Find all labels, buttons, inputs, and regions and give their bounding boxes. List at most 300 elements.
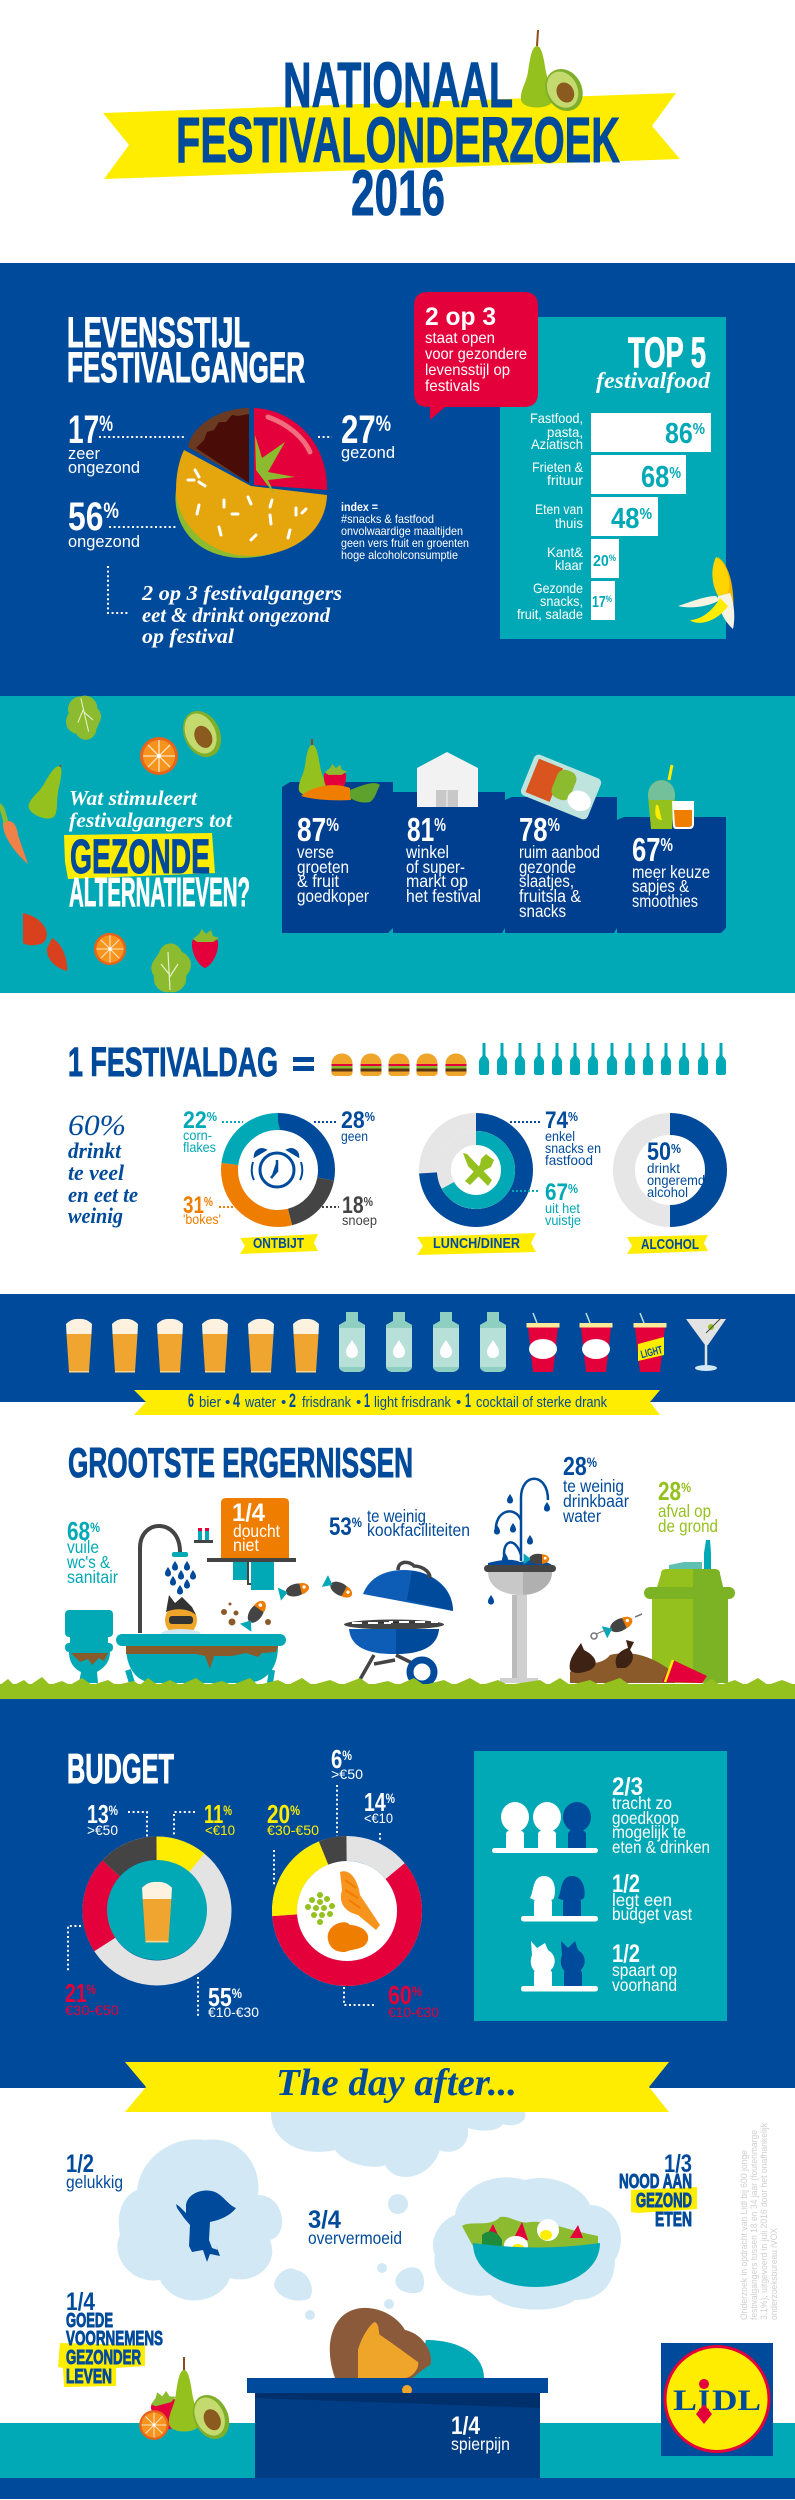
text row 2: 1/2: [612, 1870, 640, 1898]
column: 67%: 67: [632, 831, 669, 868]
labels: drink budget: 55: [208, 1982, 237, 2012]
panel: drinks: [66, 1312, 726, 1415]
bar chart: Gezonde: [533, 580, 583, 596]
bar chart: %: [606, 594, 612, 604]
labels: drink budget: €30-€50: [65, 2002, 119, 2018]
people row 2: [521, 1876, 598, 1922]
labels: drink budget: <€10: [205, 1822, 235, 1838]
label: 1/4 spierpijn: spierpijn: [451, 2434, 510, 2454]
column: 78%: gezonde: [519, 857, 576, 877]
labels: ontbijt: 28: [341, 1107, 368, 1134]
label: 3/4 oververmoeid: oververmoeid: [308, 2228, 402, 2248]
column: 67%: meer keuze: [632, 862, 710, 882]
callout: 2 op 3: festivals: [425, 378, 480, 395]
heading: [596, 329, 711, 393]
icons: soft drinks: [526, 1313, 666, 1372]
heading: 1 FESTIVALDAG: [68, 1039, 278, 1085]
ribbon: drinks legend: water: [244, 1394, 276, 1411]
label: 50%: %: [671, 1141, 681, 1156]
column: 87%: & fruit: [297, 871, 339, 891]
column: 87%: 87: [297, 811, 334, 848]
column: 78%: ruim aanbod: [519, 842, 600, 862]
index definition: hoge alcoholconsumptie: [341, 548, 458, 562]
icon: orange sign 1/4: doucht: [233, 1521, 280, 1541]
callout: 2 op 3: voor gezondere: [425, 346, 527, 363]
bar chart: Fastfood,: [530, 410, 583, 426]
bar chart: frituur: [547, 472, 583, 488]
label: 27%: gezond: [341, 443, 395, 462]
label: 56%: ongezond: [68, 532, 140, 551]
panel: budget: [65, 1744, 727, 2021]
logo: Lidl: DL: [712, 2384, 761, 2417]
icon: litter pile: [570, 1613, 707, 1683]
pie chart: burger: [175, 408, 327, 558]
ribbon: ontbijt: [240, 1234, 318, 1254]
label: 1/3 nood aan gezond eten: GEZOND: [636, 2190, 692, 2212]
statement: 60%: en eet te: [68, 1182, 138, 1207]
labels: food budget: €30-€50: [267, 1822, 319, 1838]
label: 1/2 gelukkig: 1/2: [66, 2150, 94, 2178]
labels: food budget: >€50: [331, 1766, 363, 1782]
title: [103, 30, 680, 229]
bar chart: Aziatisch: [531, 436, 583, 452]
label: 50%: [647, 1138, 705, 1200]
icon: shelf and towels: [194, 1528, 296, 1590]
label: 28% water: 28: [563, 1451, 592, 1481]
label: 56%: 56: [68, 495, 112, 539]
donut: food budget: [284, 1848, 410, 1974]
icon: toilet: [65, 1610, 113, 1683]
ribbon: drinks legend: •: [225, 1394, 230, 1411]
labels: lunch/diner: 67: [545, 1179, 572, 1206]
bar chart: 20: [593, 553, 611, 570]
icon: alarm clock: [252, 1149, 302, 1187]
column: 87%: %: [326, 815, 339, 835]
text row 1: goedkoop: [612, 1808, 679, 1828]
icon: bathtub: [116, 1634, 286, 1683]
ribbon: ontbijt: ONTBIJT: [253, 1235, 304, 1252]
label: 3/4 oververmoeid: [308, 2206, 402, 2248]
panel: grootste ergernissen: [0, 1439, 795, 1699]
bar chart: 17: [592, 594, 610, 611]
icon: waste bin: [644, 1540, 735, 1683]
ribbon: drinks legend: [134, 1390, 660, 1415]
column: 81%: of super-: [406, 857, 465, 877]
labels: ontbijt: 22: [183, 1107, 210, 1134]
icon row: bottles: [479, 1043, 726, 1075]
label: 1/4 goede voornemens: 1/4: [66, 2288, 95, 2316]
callout: 2 op 3: 2 op 3: [425, 303, 496, 331]
label: 68%: [66, 1516, 118, 1587]
icon: pear and avocado: [521, 30, 590, 118]
bar chart: klaar: [555, 557, 583, 573]
panel: 1 festivaldag: [68, 1039, 726, 1255]
ribbon: drinks legend: 1: [465, 1391, 471, 1412]
text row 1: eten & drinken: [612, 1837, 710, 1857]
bar chart: %: [609, 553, 616, 563]
bar chart: pasta,: [547, 424, 583, 440]
index definition: index =: [341, 500, 378, 514]
column: 78%: %: [548, 815, 560, 835]
label: 50%: drinkt: [647, 1160, 680, 1176]
label: 1/4 spierpijn: [451, 2412, 510, 2454]
donut: drink budget: [95, 1849, 219, 1973]
labels: lunch/diner: 74: [545, 1107, 572, 1134]
ribbon: drinks legend: 1: [364, 1391, 370, 1412]
icon: salad bowl: [462, 2217, 600, 2287]
question: festivalgangers tot: [69, 808, 233, 832]
icon: orange sign 1/4: 1/4: [232, 1499, 265, 1527]
label: 1/2 gelukkig: [66, 2150, 123, 2192]
column: 78%: fruitsla &: [519, 886, 581, 906]
ribbon: drinks legend: 2: [289, 1391, 296, 1412]
column: 87%: goedkoper: [297, 886, 369, 906]
labels: ontbijt: %: [364, 1194, 373, 1209]
labels: drink budget: €10-€30: [208, 2004, 259, 2020]
clouds: [117, 2112, 621, 2320]
text row 1: mogelijk te: [612, 1822, 686, 1842]
labels: drink budget: 13: [87, 1799, 116, 1829]
column: 78%: [505, 753, 617, 933]
text row 1: 2/3: [612, 1773, 643, 1801]
label: 17%: %: [99, 411, 113, 436]
labels: drink budget: [65, 1799, 259, 2020]
column: 67%: sapjes &: [632, 876, 689, 896]
heading: FESTIVALGANGER: [67, 344, 305, 392]
column: 81%: 81: [407, 811, 444, 848]
label: 53%: kookfaciliteiten: [367, 1520, 470, 1540]
statement: 60%: te veel: [68, 1160, 125, 1185]
title text: 2016: [351, 157, 445, 229]
column: 81%: %: [434, 815, 446, 835]
column: 78%: 78: [519, 811, 556, 848]
icon: barbecue: [344, 1562, 453, 1684]
ribbon: lunch/diner: [417, 1233, 536, 1255]
donut: alcohol: [624, 1124, 716, 1216]
people row 1: [492, 1802, 598, 1853]
column: 87%: verse: [297, 842, 334, 862]
labels: ontbijt: snoep: [342, 1212, 377, 1228]
ribbon: alcohol: ALCOHOL: [641, 1236, 699, 1253]
ribbon: drinks legend: •: [456, 1394, 461, 1411]
label: 1/4 goede voornemens: GEZONDER: [66, 2347, 141, 2369]
bar chart: [517, 410, 711, 622]
callout: 2 op 3: [414, 292, 538, 420]
label: 68%: 68: [67, 1516, 96, 1546]
icon: shower: [140, 1526, 196, 1633]
label: 1/3 nood aan gezond eten: NOOD AAN: [619, 2171, 692, 2193]
labels: ontbijt: [183, 1107, 377, 1228]
bar chart: thuis: [555, 515, 583, 531]
labels: lunch/diner: snacks en: [545, 1140, 601, 1156]
panel: top 5 festivalfood: [500, 317, 734, 639]
labels: food budget: <€10: [364, 1810, 393, 1826]
script statement: [141, 581, 342, 648]
text row 2: legt een: [612, 1890, 672, 1910]
labels: food budget: 14: [364, 1787, 393, 1817]
logo: Lidl: I: [698, 2384, 710, 2417]
labels: lunch/diner: %: [568, 1181, 578, 1196]
ribbon: drinks legend: •: [281, 1394, 286, 1411]
label: 28% afval: %: [681, 1479, 691, 1495]
text row 1: tracht zo: [612, 1793, 672, 1813]
icon row: burgers: [332, 1054, 466, 1076]
bar chart: Kant&: [547, 544, 584, 560]
labels: lunch/diner: [510, 1107, 601, 1228]
label: 1/3 nood aan gezond eten: 1/3: [664, 2150, 692, 2178]
text row 3: 1/2: [612, 1940, 640, 1968]
bar chart: %: [639, 506, 652, 523]
labels: ontbijt: %: [207, 1109, 217, 1124]
label: 1/3 nood aan gezond eten: [619, 2150, 697, 2231]
bar chart: Eten van: [535, 501, 583, 517]
statement: 60%: weinig: [68, 1203, 123, 1228]
heading: GROOTSTE ERGERNISSEN: [68, 1439, 413, 1486]
label: 1/4 goede voornemens: GOEDE: [66, 2310, 113, 2332]
label: 68%: wc's &: [66, 1552, 110, 1572]
label: 68%: %: [90, 1519, 100, 1535]
column: 87%: groeten: [297, 857, 349, 877]
label: 27%: [341, 408, 395, 462]
labels: lunch/diner: fastfood: [545, 1152, 593, 1168]
label: 56%: %: [103, 498, 119, 523]
question: GEZONDE: [70, 831, 210, 884]
label: 17%: [68, 408, 140, 477]
label: 53%: [329, 1506, 470, 1541]
icon: water fountain: [484, 1479, 556, 1683]
icons: soft drinks: LIGHT: [640, 1344, 664, 1361]
script statement: eet & drinkt ongezond: [142, 603, 330, 627]
column: 78%: snacks: [519, 901, 566, 921]
labels: ontbijt: 31: [183, 1192, 210, 1219]
labels: food budget: 6: [331, 1744, 345, 1774]
small print: [739, 2123, 780, 2320]
title ribbon: [103, 93, 680, 179]
labels: food budget: %: [290, 1802, 300, 1818]
label: 27%: 27: [341, 408, 386, 452]
label: 17%: 17: [68, 408, 112, 452]
question: Wat stimuleert: [69, 786, 198, 810]
callout: 2 op 3: staat open: [425, 330, 495, 347]
bar chart: Frieten &: [532, 459, 584, 475]
ribbon: drinks legend: 6: [188, 1391, 194, 1412]
label: 1/4 goede voornemens: LEVEN: [66, 2366, 112, 2388]
ribbon: drinks legend: 4: [233, 1391, 240, 1412]
icon: orange sign 1/4: [221, 1498, 289, 1558]
labels: food budget: [267, 1744, 439, 2020]
decorative fruit: [0, 693, 228, 992]
column: 81%: het festival: [406, 886, 481, 906]
index definition: geen vers fruit en groenten: [341, 536, 469, 550]
labels: food budget: %: [412, 1983, 422, 1999]
labels: lunch/diner: %: [568, 1109, 578, 1124]
donut: ontbijt: [230, 1122, 326, 1218]
label: 68%: sanitair: [67, 1567, 118, 1587]
labels: drink budget: >€50: [87, 1822, 118, 1838]
icon: fruit group: [139, 2357, 236, 2445]
heading: TOP 5: [628, 329, 706, 377]
label: 50%: 50: [647, 1138, 675, 1166]
small print: 3,1%), uitgevoerd in juli 2016 door het onafhankelijk: [759, 2123, 770, 2320]
donut: lunch/diner: [428, 1122, 524, 1218]
ribbon: drinks legend: light frisdrank: [374, 1394, 451, 1411]
labels: food budget: 60: [388, 1980, 417, 2010]
index definition: #snacks & fastfood: [341, 512, 434, 526]
text row 3: voorhand: [612, 1975, 677, 1995]
column: 81%: markt op: [406, 871, 468, 891]
text row 3: [612, 1940, 677, 1995]
label: 53%: 53: [329, 1513, 357, 1541]
labels: ontbijt: flakes: [183, 1139, 216, 1155]
label: 28% water: te weinig: [563, 1476, 624, 1496]
labels: drink budget: %: [232, 1985, 242, 2001]
label: 28% water: water: [562, 1506, 601, 1526]
label: 28% water: drinkbaar: [563, 1491, 629, 1511]
icons: water bottles: [339, 1312, 506, 1372]
logo: Lidl: [661, 2343, 773, 2456]
icon: man in bath: [161, 1595, 201, 1639]
labels: food budget: €10-€30: [388, 2004, 439, 2020]
bar chart: %: [669, 465, 681, 482]
ribbon heading: The day after...: [276, 2062, 517, 2104]
bar chart: %: [693, 421, 705, 438]
column: 67%: [617, 765, 726, 933]
title text: NATIONAAL: [283, 49, 513, 121]
label: 28% water: [562, 1451, 629, 1526]
label: 1/2 gelukkig: gelukkig: [66, 2172, 123, 2192]
labels: lunch/diner: vuistje: [545, 1212, 581, 1228]
labels: ontbijt: %: [365, 1109, 375, 1124]
labels: drink budget: 21: [65, 1978, 94, 2008]
labels: drink budget: 11: [204, 1799, 232, 1829]
column: 81%: winkel: [405, 842, 449, 862]
bar chart: snacks,: [540, 593, 583, 609]
label: 68%: vuile: [67, 1537, 99, 1557]
label: 28% afval: 28: [658, 1476, 687, 1506]
labels: food budget: %: [342, 1747, 352, 1763]
labels: ontbijt: 'bokes': [183, 1211, 221, 1227]
text row 2: budget vast: [612, 1904, 692, 1924]
heading: festivalfood: [596, 368, 711, 393]
label: 27%: %: [376, 411, 391, 436]
bar chart: fruit, salade: [517, 606, 583, 622]
heading: LEVENSSTIJL: [67, 309, 250, 357]
column: 67%: %: [661, 835, 673, 855]
ribbon: lunch/diner: LUNCH/DINER: [433, 1235, 520, 1252]
labels: drink budget: %: [223, 1802, 232, 1818]
illustration: woman asleep at desk: [247, 2308, 548, 2478]
question: [64, 786, 250, 915]
label: 3/4 oververmoeid: 3/4: [308, 2206, 341, 2234]
text row 1: [612, 1773, 710, 1857]
grass: [0, 1677, 795, 1699]
label: 28% afval: de grond: [658, 1516, 718, 1536]
icons: beers: [66, 1319, 319, 1372]
title text: [176, 49, 620, 229]
bar chart: 68: [641, 459, 675, 494]
label: 28% afval: afval op: [658, 1501, 711, 1521]
label: 1/4 goede voornemens: [58, 2288, 163, 2388]
panel: gezonde alternatieven: ALTERNATIEVEN?: [69, 869, 250, 915]
heading: [67, 309, 305, 392]
column: 67%: smoothies: [632, 891, 698, 911]
people row 3: [521, 1941, 598, 1992]
icon: banana: [678, 557, 734, 629]
label: 28% afval: [658, 1476, 718, 1536]
panel: budget behaviour: [474, 1751, 727, 2021]
label: 53%: te weinig: [367, 1506, 426, 1526]
ribbon: drinks legend: bier: [199, 1394, 221, 1411]
label: 28% water: %: [587, 1454, 597, 1470]
label: 1/4 goede voornemens: VOORNEMENS: [66, 2328, 163, 2350]
text row 2: [612, 1870, 692, 1924]
label: 1/4 spierpijn: 1/4: [451, 2412, 480, 2440]
statement: 60%: 60%: [68, 1109, 126, 1142]
small print: festivalgangers tussen 18 en 34 jaar (foutenmarge: [749, 2130, 760, 2320]
ribbon heading: [125, 2062, 669, 2112]
panel: the day after: [58, 2062, 780, 2478]
index definition: [341, 500, 469, 562]
bar chart: 86: [665, 418, 697, 450]
column: 78%: slaatjes,: [519, 871, 574, 891]
index definition: onvolwaardige maaltijden: [341, 524, 463, 538]
statement: 60%: [68, 1109, 138, 1228]
statement: 60%: drinkt: [68, 1138, 122, 1163]
panel: levensstijl festivalganger: [67, 309, 469, 648]
label: 17%: zeer: [68, 444, 100, 463]
bar chart: 48: [611, 503, 643, 535]
ribbon: drinks legend: frisdrank: [302, 1394, 351, 1411]
labels: food budget: %: [386, 1790, 395, 1806]
icon: happy silhouette: [176, 2191, 236, 2262]
callout: 2 op 3: levensstijl op: [425, 362, 510, 379]
small print: Onderzoek in opdracht van Lidl bij 600 jonge: [739, 2150, 750, 2320]
labels: ontbijt: 18: [342, 1192, 369, 1219]
icon: orange sign 1/4: niet: [233, 1535, 259, 1555]
label: 53%: %: [352, 1514, 362, 1530]
icon: plate of food: [305, 1871, 380, 1952]
labels: lunch/diner: enkel: [545, 1128, 575, 1144]
labels: ontbijt: %: [204, 1194, 213, 1209]
labels: drink budget: %: [87, 1981, 96, 1997]
column: 81%: [393, 752, 505, 933]
text row 3: spaart op: [612, 1960, 677, 1980]
icon: cutlery: [463, 1153, 494, 1186]
script statement: op festival: [142, 624, 234, 648]
labels: drink budget: %: [109, 1802, 118, 1818]
column: 87%: [282, 739, 393, 933]
label: 50%: ongeremd: [647, 1172, 705, 1188]
ribbon: alcohol: [627, 1235, 708, 1254]
labels: food budget: 20: [267, 1799, 296, 1829]
labels: ontbijt: geen: [341, 1128, 368, 1144]
label: 17%: ongezond: [68, 458, 140, 477]
icon: cocktail: [686, 1317, 726, 1371]
icon: beer glass: [142, 1882, 172, 1942]
label: 56%: [68, 495, 140, 551]
ribbon: drinks legend: •: [356, 1394, 361, 1411]
labels: lunch/diner: uit het: [545, 1200, 580, 1216]
panel: gezonde alternatieven: [0, 693, 726, 992]
ribbon: drinks legend: cocktail of sterke drank: [476, 1394, 607, 1411]
logo: Lidl: L: [673, 2384, 697, 2417]
heading: BUDGET: [67, 1745, 174, 1792]
label: 1/3 nood aan gezond eten: ETEN: [655, 2209, 692, 2231]
icons: flying fish: [221, 1575, 355, 1632]
script statement: 2 op 3 festivalgangers: [141, 581, 342, 605]
labels: ontbijt: corn-: [183, 1127, 212, 1143]
small print: onderzoeksbureau iVOX: [769, 2227, 780, 2320]
